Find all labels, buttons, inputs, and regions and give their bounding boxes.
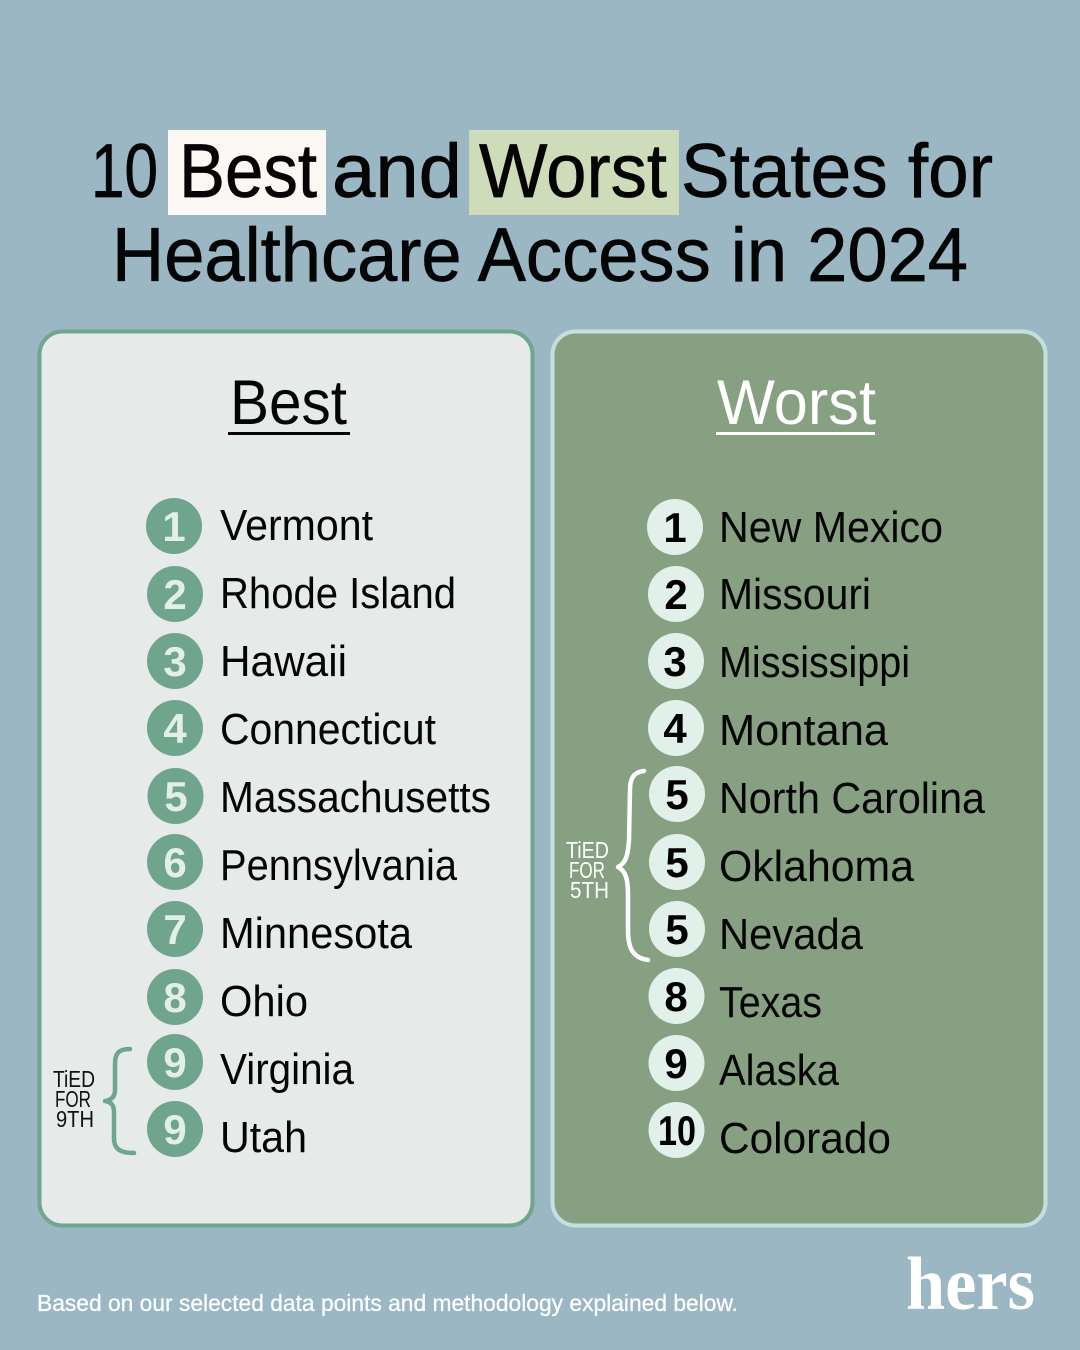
ranked list: best: Massachusetts <box>220 773 491 822</box>
heading: best: Best <box>230 368 347 438</box>
ranked list: worst: Texas <box>719 978 822 1027</box>
ranked list: worst: 4 <box>663 705 687 752</box>
ranked list: best: Utah <box>220 1113 307 1162</box>
title: and <box>332 129 462 214</box>
bracket: tied for 5th: FOR <box>569 857 605 883</box>
ranked list: worst: New Mexico <box>719 503 943 552</box>
ranked list: best: 4 <box>163 705 187 752</box>
panel: worst <box>552 332 1046 1226</box>
ranked list: worst: 5 <box>665 906 689 953</box>
title: States for <box>681 129 993 214</box>
panel: best <box>40 332 532 1226</box>
ranked list: worst: 3 <box>663 638 687 685</box>
bracket: tied for 9th <box>53 1049 134 1153</box>
title: Worst <box>479 129 667 214</box>
ranked list: worst: Mississippi <box>719 638 910 687</box>
ranked list: worst: 8 <box>664 973 688 1020</box>
ranked list: best: 6 <box>163 839 187 886</box>
ranked list: best: Pennsylvania <box>220 841 457 890</box>
ranked list: best: 5 <box>164 773 188 820</box>
ranked list: best: 8 <box>163 974 187 1021</box>
ranked list: worst: 5 <box>665 839 689 886</box>
ranked list: best: 2 <box>163 571 187 618</box>
ranked list: best: Ohio <box>220 977 308 1026</box>
ranked list: best: Connecticut <box>220 705 436 754</box>
ranked list: best: Rhode Island <box>220 569 456 618</box>
ranked list: worst: Montana <box>719 706 889 755</box>
ranked list: worst: Colorado <box>719 1114 891 1163</box>
ranked list: worst <box>647 499 985 1163</box>
ranked list: best <box>146 498 491 1162</box>
ranked list: best: 1 <box>162 503 186 550</box>
ranked list: worst: 9 <box>664 1040 688 1087</box>
ranked list: worst: 1 <box>663 504 687 551</box>
ranked list: best: 3 <box>163 638 187 685</box>
ranked list: best: 9 <box>163 1106 187 1153</box>
ranked list: worst: 5 <box>665 771 689 818</box>
bracket: tied for 9th: FOR <box>55 1086 91 1112</box>
ranked list: best: Virginia <box>220 1045 354 1094</box>
ranked list: best: 9 <box>163 1039 187 1086</box>
bracket: tied for 9th: TiED <box>53 1066 95 1092</box>
ranked list: worst: Alaska <box>719 1046 839 1095</box>
ranked list: worst: Oklahoma <box>719 842 915 891</box>
bracket: tied for 5th: 5TH <box>570 877 609 903</box>
bracket: tied for 9th: 9TH <box>56 1106 94 1132</box>
heading: worst: Worst <box>717 368 876 438</box>
bracket: tied for 5th: TiED <box>566 837 609 863</box>
title <box>91 129 993 298</box>
footnote: Based on our selected data points and methodology explained below. <box>37 1290 738 1316</box>
ranked list: best: 7 <box>163 906 187 953</box>
ranked list: worst: 2 <box>664 571 688 618</box>
title: Healthcare Access in 2024 <box>112 213 968 298</box>
ranked list: worst: Missouri <box>719 570 871 619</box>
bracket: tied for 5th <box>566 771 648 960</box>
ranked list: best: Vermont <box>220 501 373 550</box>
ranked list: worst: 10 <box>658 1107 696 1154</box>
ranked list: worst: North Carolina <box>719 774 985 823</box>
ranked list: worst: Nevada <box>719 910 863 959</box>
title: Best <box>179 129 317 214</box>
ranked list: best: Hawaii <box>220 637 347 686</box>
title: 10 <box>91 129 158 214</box>
logo: hers: hers <box>906 1243 1035 1326</box>
ranked list: best: Minnesota <box>220 909 412 958</box>
